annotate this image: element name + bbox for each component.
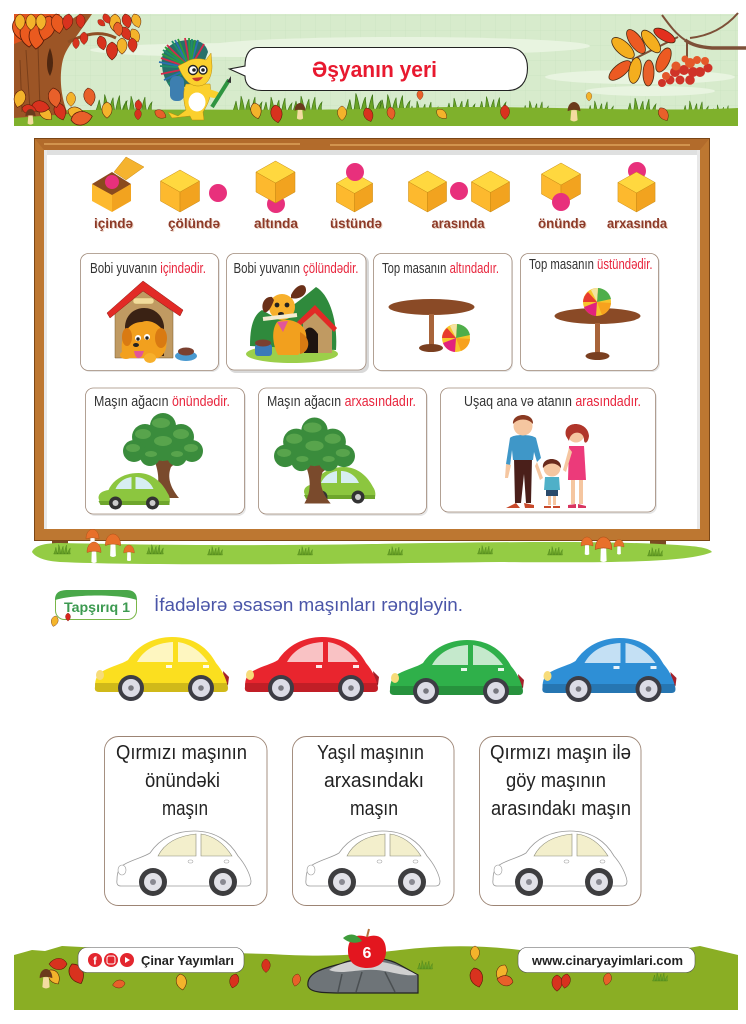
cube: önündə [538, 163, 586, 231]
yellow car [95, 637, 229, 701]
card: car behind tree [258, 388, 428, 516]
grass under board with mushrooms [32, 529, 712, 564]
exercise box 1 [104, 736, 267, 906]
autumn tree [11, 12, 143, 118]
header banner [11, 12, 746, 127]
cube: arxasında [607, 162, 667, 231]
task badge [50, 590, 137, 627]
cube: çölündə [160, 170, 227, 231]
body [168, 84, 211, 120]
table and ball [388, 299, 474, 352]
cube: üstündə: üstündə [330, 215, 382, 231]
website pill: www.cinaryayimlari.com [531, 953, 683, 968]
social icons [88, 953, 134, 968]
outline car 3 [493, 831, 627, 896]
family [505, 415, 589, 508]
coloured cars row [95, 637, 677, 704]
card: car in front of tree: Maşın ağacın önündədir. [94, 393, 230, 410]
outline car 1 [117, 831, 251, 896]
exercise box 2: Yaşıl maşının [317, 742, 424, 764]
rowan branch with berries [606, 13, 746, 87]
backpack [170, 76, 184, 101]
cube: önündə: önündə [538, 215, 586, 231]
tree and car [98, 413, 203, 510]
cube: içində: içində [94, 215, 133, 231]
board legs [52, 538, 666, 552]
exercise box 2: maşın [350, 798, 398, 820]
card: ball on table: Top masanın üstündədir. [529, 256, 652, 273]
child [543, 459, 561, 508]
title text: Əşyanın yeri [312, 57, 437, 82]
red car [245, 637, 379, 701]
kennel with dog [107, 281, 197, 363]
position cubes row [92, 157, 667, 231]
apple page number: 6 [363, 945, 372, 962]
board frame [34, 138, 710, 540]
exercise box 3 [480, 736, 641, 906]
spikes [159, 38, 208, 90]
task instruction: İfadələrə əsasən maşınları rəngləyin. [154, 594, 463, 615]
footer ground [14, 946, 738, 1010]
outline car 2 [306, 831, 440, 896]
rock [308, 958, 418, 993]
cube: içində [92, 157, 144, 231]
exercise box 1: Qırmızı maşının [116, 742, 247, 764]
wooden board [34, 138, 710, 552]
card: ball under table: Top masanın altındadır. [382, 260, 499, 277]
dog and kennel scene [246, 285, 338, 363]
apple page number [343, 929, 386, 968]
social icons: f [93, 956, 97, 968]
website pill [518, 948, 695, 972]
leaves and mushrooms on the ground [12, 87, 671, 127]
card: dog outside kennel: Bobi yuvanın çölündədir. [234, 260, 358, 277]
footer [14, 929, 738, 1010]
banner ground and grass [14, 93, 738, 126]
social pill [78, 948, 244, 972]
exercise box 2: arxasındakı [324, 770, 424, 792]
father [505, 415, 543, 508]
cube: altında: altında [254, 215, 298, 231]
card: ball on table [520, 254, 660, 372]
exercise box 1: önündəki [145, 770, 220, 792]
cube: arasında: arasında [432, 215, 485, 231]
card: child between parents [440, 388, 657, 514]
exercise box 3: arasındakı maşın [491, 798, 631, 820]
pencil [212, 80, 229, 107]
blue car [542, 638, 676, 702]
title speech bubble [230, 48, 528, 90]
card: car in front of tree [86, 388, 246, 516]
exercise box 3: göy maşının [506, 770, 606, 792]
card: dog inside kennel [80, 254, 220, 372]
card: child between parents: Uşaq ana və atanın arasındadır. [464, 393, 641, 410]
footer leaves [40, 946, 668, 991]
head [178, 53, 212, 86]
green car [390, 640, 524, 704]
car and tree [274, 417, 375, 504]
hedgehog mascot [159, 38, 231, 120]
task badge: Tapşırıq 1 [64, 599, 130, 615]
social pill: Çinar Yayımları [141, 953, 234, 968]
card: dog inside kennel: Bobi yuvanın içindədir. [90, 260, 206, 277]
exercise box 3: Qırmızı maşın ilə [490, 742, 631, 764]
cube: çölündə: çölündə [168, 215, 220, 231]
cube: arxasında: arxasında [607, 215, 667, 231]
cube: üstündə [330, 163, 382, 231]
cube: altında [254, 161, 298, 231]
mother [563, 424, 589, 508]
board surface [44, 150, 700, 529]
banner sky [14, 14, 738, 126]
card: car behind tree: Maşın ağacın arxasındadır. [267, 393, 416, 410]
table with ball on top [554, 288, 640, 360]
exercise box 1: maşın [162, 798, 208, 820]
cube: arasında [408, 171, 510, 231]
exercise box 2 [292, 736, 454, 906]
card: dog outside kennel [226, 254, 369, 373]
card: ball under table [374, 254, 513, 372]
